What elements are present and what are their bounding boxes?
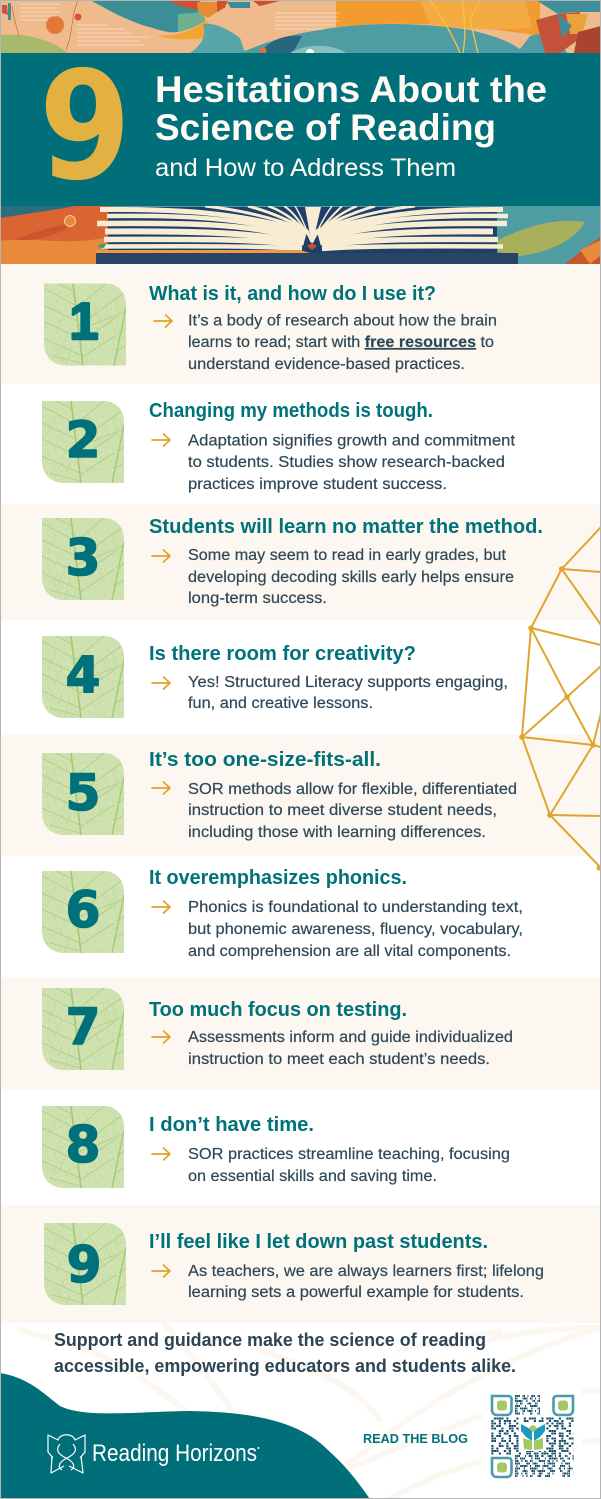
text block 6: Phonics is foundational to understanding text, xyxy=(188,899,523,916)
icon: leaf number 6: 6 xyxy=(66,881,100,939)
text block 6 xyxy=(188,899,523,960)
arrow 2 xyxy=(152,434,170,446)
heading 1: What is it, and how do I use it? xyxy=(149,283,436,305)
title: Science of Reading xyxy=(155,107,496,148)
text block 1: understand evidence-based practices. xyxy=(188,356,465,373)
text block 6: and comprehension are all vital components. xyxy=(188,943,511,960)
panel: hesitation 5 xyxy=(0,735,601,856)
banner art: open book xyxy=(0,206,601,264)
QR center butterfly xyxy=(521,1424,545,1450)
text block 7: Assessments inform and guide individualized xyxy=(188,1029,513,1046)
panel: hesitation 6 xyxy=(0,856,601,977)
text block 7 xyxy=(188,1029,513,1068)
text block 1: learns to read; start with free resources to xyxy=(188,334,494,351)
closing statement: Support and guidance make the science of reading xyxy=(54,1330,486,1350)
text block 6: but phonemic awareness, fluency, vocabulary, xyxy=(188,921,523,938)
wordmark: Reading Horizons xyxy=(92,1440,257,1467)
closing statement: accessible, empowering educators and students alike. xyxy=(54,1356,516,1376)
icon: leaf number 6 xyxy=(42,871,124,953)
text block 5: including those with learning differences. xyxy=(188,824,486,841)
text block 5: SOR methods allow for flexible, differentiated xyxy=(188,781,517,798)
text block 5 xyxy=(188,781,517,841)
icon: leaf number 3: 3 xyxy=(66,529,100,587)
text block 3: developing decoding skills early helps ensure xyxy=(188,569,514,586)
icon: leaf number 7: 7 xyxy=(66,998,100,1056)
arrow 8 xyxy=(152,1148,170,1160)
icon: leaf number 8: 8 xyxy=(66,1116,100,1174)
icon: leaf number 1 xyxy=(44,284,126,366)
heading 9: I’ll feel like I let down past students. xyxy=(149,1231,488,1253)
book page block xyxy=(108,207,497,254)
text block 3: long-term success. xyxy=(188,590,327,607)
closing statement xyxy=(54,1330,516,1376)
logo: Reading Horizons xyxy=(48,1435,260,1473)
QR code xyxy=(482,1387,582,1489)
text block 4: fun, and creative lessons. xyxy=(188,695,373,712)
text block 8 xyxy=(188,1146,510,1185)
icon: leaf number 9 xyxy=(44,1223,126,1305)
icon: leaf number 3 xyxy=(42,518,124,600)
heading 2: Changing my methods is tough. xyxy=(149,400,433,422)
text block 1 xyxy=(188,313,497,373)
text block 3: Some may seem to read in early grades, but xyxy=(188,547,507,564)
icon: leaf number 2: 2 xyxy=(66,411,100,469)
icon: leaf number 9: 9 xyxy=(67,1236,101,1294)
icon: leaf number 4: 4 xyxy=(66,646,100,704)
title: Hesitations About the xyxy=(155,69,547,110)
geometric network decoration xyxy=(519,527,601,870)
icon: leaf number 2 xyxy=(42,401,124,483)
icon: leaf number 4 xyxy=(42,636,124,718)
big numeral 9: 9 xyxy=(39,40,131,214)
icon: leaf number 5: 5 xyxy=(66,764,100,822)
panel: hesitation 1 xyxy=(0,264,601,384)
heading 5: It’s too one-size-fits-all. xyxy=(149,749,381,771)
icon: leaf number 7 xyxy=(42,988,124,1070)
text block 2: practices improve student success. xyxy=(188,476,447,493)
arrow 1 xyxy=(154,315,172,327)
text block 4 xyxy=(188,674,508,712)
heading 8: I don’t have time. xyxy=(149,1114,314,1136)
banner art: top abstract landscape xyxy=(0,0,601,57)
text block 8: on essential skills and saving time. xyxy=(188,1168,437,1185)
arrow 4 xyxy=(152,677,170,689)
QR modules xyxy=(491,1396,574,1476)
text block 2 xyxy=(188,432,516,493)
panel: hesitation 2 xyxy=(0,384,601,504)
subtitle: and How to Address Them xyxy=(155,154,456,182)
heading 4: Is there room for creativity? xyxy=(149,643,416,665)
text block 8: SOR practices streamline teaching, focusing xyxy=(188,1146,510,1163)
arrow 5 xyxy=(152,782,170,794)
panel: hesitation 7 xyxy=(0,977,601,1089)
heading 7: Too much focus on testing. xyxy=(149,999,407,1021)
footer teal wave xyxy=(0,1373,370,1499)
panel: hesitation 9 xyxy=(0,1205,601,1323)
call to action: READ THE BLOG xyxy=(363,1432,468,1446)
footer background veins xyxy=(20,1325,600,1499)
icon: butterfly mark xyxy=(48,1435,85,1473)
arrow 3 xyxy=(152,550,170,562)
text block 2: to students. Studies show research-backed xyxy=(188,454,505,471)
text block 7: instruction to meet each student’s needs. xyxy=(188,1051,490,1068)
title xyxy=(155,69,547,148)
text block 9 xyxy=(188,1263,544,1301)
QR finder markers xyxy=(492,1396,573,1477)
heading 3: Students will learn no matter the method. xyxy=(149,516,543,538)
panel: hesitation 3 xyxy=(0,504,601,620)
icon: leaf number 5 xyxy=(42,753,124,835)
panel: hesitation 4 xyxy=(0,620,601,735)
arrow 6 xyxy=(152,901,170,913)
arrow 9 xyxy=(152,1265,170,1277)
text block 9: learning sets a powerful example for students. xyxy=(188,1284,524,1301)
icon: leaf number 8 xyxy=(42,1106,124,1188)
heading 6: It overemphasizes phonics. xyxy=(149,867,407,889)
icon: leaf number 1: 1 xyxy=(70,293,98,351)
text block 2: Adaptation signifies growth and commitment xyxy=(188,432,516,450)
text block 1: It’s a body of research about how the brain xyxy=(188,313,497,330)
text block 5: instruction to meet diverse student needs, xyxy=(188,802,497,819)
text block 9: As teachers, we are always learners first; lifelong xyxy=(188,1263,544,1280)
header band xyxy=(0,40,601,214)
text block 4: Yes! Structured Literacy supports engaging, xyxy=(188,674,508,691)
text block 3 xyxy=(188,547,514,607)
arrow 7 xyxy=(152,1031,170,1043)
panel: hesitation 8 xyxy=(0,1089,601,1205)
